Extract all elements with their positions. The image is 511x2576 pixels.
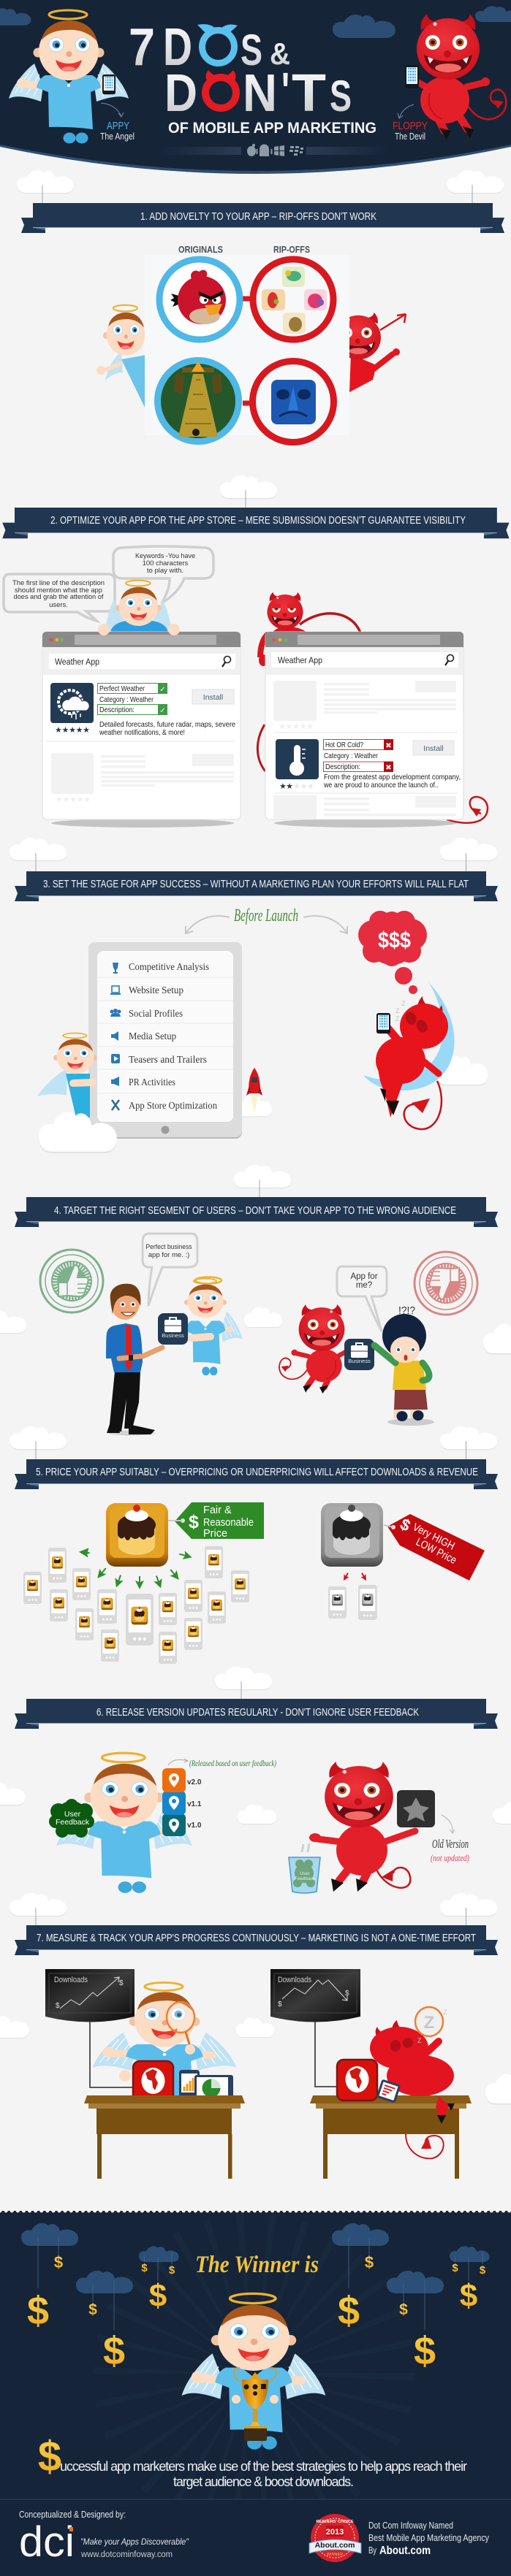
rating: two stars: ★★★★★ (279, 781, 314, 791)
angel beside tablet (37, 1033, 97, 1117)
icon: trash with user feedback: User (300, 1871, 311, 1876)
user feedback cloud: User (64, 1810, 81, 1819)
section 1: originals vs rip-offs: RIP-OFFS (273, 245, 310, 255)
speech bubble: first line: should mention what the app (15, 586, 102, 595)
note: released based on user feedback (168, 1758, 276, 1768)
placeholder listing: ★★★★★ (56, 795, 91, 804)
award text: About.com (379, 2545, 431, 2557)
banner 2 with hanging cloud (2, 475, 510, 538)
icon: old app (397, 1790, 435, 1827)
field: description: Description: (325, 763, 360, 771)
badge: readers choice 2013 (309, 2514, 361, 2562)
devil peeking (336, 312, 406, 392)
title: N (243, 64, 277, 123)
note: old version: (not updated) (431, 1852, 469, 1863)
desk setup: devil sleeping (270, 1969, 472, 2179)
title: 7 (129, 18, 155, 77)
banner 6 with hanging cloud (15, 1667, 498, 1729)
version stack: v2.0 (187, 1778, 202, 1786)
speech bubble: perfect business app: Perfect business (146, 1243, 192, 1251)
stamp: thumbs up (40, 1250, 103, 1312)
speech bubble: keywords: Keywords -You have (135, 552, 195, 560)
trophy (232, 2368, 279, 2441)
speech bubble: keywords (113, 546, 213, 603)
title: T (292, 64, 326, 123)
confused kid (374, 1304, 434, 1426)
speech bubble: keywords: to play with. (147, 567, 183, 575)
note: released based on user feedback: (Released based on user feedback) (189, 1758, 276, 1768)
before launch label with arrows: Before Launch (234, 906, 298, 925)
header (0, 0, 511, 174)
field: description: ✖ (385, 764, 392, 772)
character: Floppy the devil (408, 14, 506, 139)
rating: five stars: ★★★★★ (55, 725, 90, 735)
row: social profiles: Social Profiles (129, 1009, 183, 1020)
thought cloud (358, 911, 427, 994)
search box (271, 652, 458, 668)
before launch label with arrows (186, 906, 347, 933)
ring: rip-off temple game (253, 361, 333, 443)
install button (192, 689, 234, 704)
banner 1 with hanging clouds (17, 170, 504, 233)
sleeping devil: Z (417, 2037, 422, 2044)
price tag: fair (168, 1502, 264, 1540)
banner 3 with hanging clouds (10, 838, 498, 901)
sleeping devil: Z (395, 1007, 400, 1014)
banner 5 with hanging clouds (10, 1426, 498, 1489)
raining dollars right: $ (414, 2329, 436, 2373)
raining dollars left (21, 2223, 179, 2373)
phone: bar chart (179, 2070, 200, 2100)
devil dreaming on moon (358, 911, 488, 1129)
section clouds (0, 1782, 511, 1824)
speech bubble: app for me (337, 1266, 387, 1331)
monitor: downloads rising: $ (56, 2002, 60, 2010)
red arrows (341, 1572, 368, 1582)
angel behind browser (105, 581, 173, 632)
label: Floppy (393, 104, 428, 142)
field: title: Perfect Weather (99, 684, 145, 693)
speech bubble: perfect business app: app for me. :) (148, 1251, 189, 1259)
row: PR activities: PR Activities (129, 1077, 175, 1088)
credit: concept by dci: "Make your Apps Discoverable" (80, 2538, 189, 2547)
price tag: very high low: $ (397, 1515, 414, 1535)
badge: readers choice 2013: READERS' CHOICE (316, 2520, 354, 2524)
label: Floppy: The Devil (395, 131, 425, 142)
monitor: downloads rising (45, 1969, 135, 2022)
price tag: very high low: LOW Price (414, 1536, 458, 1567)
desk (310, 2095, 472, 2179)
raining dollars right: $ (460, 2278, 477, 2314)
raining dollars left: $ (149, 2278, 167, 2314)
cloud behind moon (436, 1055, 488, 1085)
raining dollars right: $ (399, 2301, 408, 2318)
icon: trash with user feedback: Feedback (295, 1876, 316, 1881)
price tag: fair: Reasonable (203, 1517, 254, 1529)
title (129, 18, 352, 123)
browser: bad listing (265, 632, 463, 828)
angel with business app (168, 1277, 243, 1375)
devil with old version (309, 1762, 415, 1892)
moon (363, 982, 455, 1090)
icon: rocket (246, 1068, 262, 1114)
cloud behind rocket (238, 1095, 272, 1117)
closing statement: target audience & boost downloads. (173, 2474, 354, 2489)
install button (413, 741, 454, 755)
credit: concept by dci: dci (19, 2518, 75, 2566)
version stack (162, 1768, 202, 1836)
banner 7 with hanging clouds (10, 1893, 498, 1955)
speech bubble: first line: The first line of the description (12, 579, 105, 587)
subtitle: OF MOBILE APP MARKETING (168, 120, 376, 137)
sleeping devil: Z (401, 1000, 406, 1007)
raining dollars right: $ (365, 2253, 374, 2271)
title: & (270, 37, 290, 71)
price tag: fair: Price (203, 1528, 227, 1540)
angel with magnifier (93, 1982, 236, 2112)
raining dollars right (332, 2223, 490, 2373)
raining dollars left: $ (141, 2262, 148, 2274)
app icon: weather (50, 683, 94, 723)
field: description (323, 761, 393, 772)
price tag: fair: Fair & (203, 1505, 232, 1516)
user feedback cloud (49, 1799, 94, 1838)
title: D (164, 64, 197, 123)
monitor: downloads rising: $ (119, 1979, 124, 1987)
award text (368, 2520, 490, 2557)
price tag: fair: $ (189, 1512, 199, 1532)
monitor: downloads falling: $ (345, 1990, 349, 1998)
placeholder listing top (273, 681, 456, 731)
search box (49, 654, 235, 669)
badge: readers choice 2013: WINNER (327, 2553, 343, 2557)
devil behind browser (257, 592, 488, 823)
closing statement: uccessful app marketers make use of the best strategies to help apps reach their (60, 2459, 467, 2474)
angel with version stack (56, 1753, 192, 1893)
placeholder listing top: ★★★★★ (279, 722, 314, 731)
version stack: v1.1 (187, 1800, 202, 1808)
tablet checklist (88, 942, 242, 1139)
banner 6 with hanging cloud: 6. RELEASE VERSION UPDATES REGULARLY - DON'T IGNORE USER FEEDBACK (96, 1707, 419, 1719)
row: app store optimization: App Store Optimization (129, 1101, 217, 1112)
phone in devil hand (405, 65, 419, 88)
green arrows (79, 1548, 193, 1590)
label: Appy: APPY (107, 120, 129, 132)
raining dollars left: $ (88, 2301, 97, 2318)
speech bubble: app for me: App for (350, 1272, 378, 1281)
section clouds (0, 1307, 511, 1354)
app icon: thermometer (276, 739, 319, 779)
section clouds (0, 2015, 511, 2104)
ring: rip-off birds (253, 259, 333, 340)
closing statement (38, 2433, 467, 2489)
rating: two stars: ★★ (279, 781, 293, 791)
speech bubble: first line: users. (49, 601, 68, 609)
row: website setup: Website Setup (129, 985, 183, 996)
stamp: thumbs down (415, 1252, 477, 1315)
businessman (106, 1284, 162, 1436)
user feedback cloud: Feedback (56, 1818, 90, 1827)
title: S (241, 26, 262, 74)
speech bubble: first line: does and grab the attention of (13, 593, 104, 601)
browser: good listing: Category : Weather (99, 695, 154, 704)
badge: readers choice 2013: 2013 (326, 2528, 344, 2537)
raining dollars right: $ (480, 2264, 486, 2277)
award text: By (368, 2545, 377, 2556)
install button: Install (203, 693, 223, 702)
credit: concept by dci: Conceptualized & Designed by: (19, 2510, 126, 2520)
description text: From the greatest app development company, (324, 773, 461, 781)
section 1: originals vs rip-offs (96, 245, 406, 443)
small tablet (376, 2079, 401, 2103)
browser: bad listing: Weather App (278, 657, 322, 665)
sleeping devil: Z (395, 1015, 400, 1023)
speech bubble: first line (4, 574, 115, 621)
monitor: downloads falling: $ (278, 2000, 282, 2009)
install button: Install (423, 744, 444, 753)
column labels: ORIGINALS (178, 245, 223, 255)
footer panel (0, 2211, 511, 2576)
header clouds (0, 6, 511, 38)
platform icons (159, 144, 388, 156)
field: title (98, 683, 167, 694)
app icon: globe (337, 2060, 377, 2101)
halo (195, 1277, 222, 1284)
field: title: ✖ (385, 742, 392, 750)
phones reached (23, 1546, 249, 1664)
field: description: ✓ (159, 707, 166, 715)
browser: good listing: Weather App (55, 658, 99, 667)
row: teasers and trailers: Teasers and Trailers (129, 1055, 207, 1066)
monitor: downloads rising: Downloads (54, 1976, 88, 1984)
raining dollars left: $ (103, 2329, 125, 2373)
sleeping devil: Z (443, 2009, 447, 2016)
closing statement: $ (38, 2433, 61, 2480)
browser: bad listing: Category : Weather (324, 752, 378, 760)
angel peeking (96, 305, 148, 410)
field: title (323, 739, 393, 750)
connectors (243, 299, 251, 403)
title: D (163, 18, 192, 77)
ring: original temple game (158, 361, 238, 441)
label: Appy (100, 103, 135, 142)
title: S (330, 72, 352, 121)
label: Appy: The Angel (100, 131, 135, 142)
field: description: Description: (99, 706, 135, 714)
row: media setup: Media Setup (129, 1031, 176, 1042)
comparison panel (145, 255, 349, 435)
browser: bad listing: we are proud to anounce the launch of.. (323, 781, 439, 790)
price tag: very high low: Very HIGH (411, 1521, 457, 1553)
placeholder listing bottom (273, 795, 456, 819)
sleeping devil: Z (424, 2013, 434, 2033)
desk setup: angel tracking (45, 1969, 245, 2179)
award text: Dot Com Infoway Named (368, 2520, 453, 2531)
award text: Best Mobile App Marketing Agency (368, 2533, 490, 2543)
row: competitive analysis: Competitive Analysis (129, 962, 209, 973)
note: old version (431, 1815, 469, 1863)
version stack: v1.0 (187, 1822, 202, 1830)
placeholder listing (51, 753, 234, 804)
browser: good listing (42, 624, 241, 828)
field: title: Hot OR Cold? (325, 741, 363, 749)
monitor: downloads falling (270, 1969, 360, 2022)
field: description (98, 704, 167, 715)
app icon: business (good) (158, 1313, 188, 1345)
devil with business app (279, 1304, 351, 1394)
raining dollars left: $ (169, 2264, 175, 2277)
raining dollars right: $ (452, 2262, 458, 2274)
tablet: pie chart (194, 2075, 233, 2102)
row: media setup (111, 1031, 176, 1042)
app icon: cake in colour (106, 1503, 168, 1567)
angel with trophy (182, 2293, 325, 2450)
magnifier with Z (415, 2007, 443, 2036)
phone in angel hand (102, 74, 116, 94)
angel hands (98, 624, 180, 635)
banner 4 with hanging cloud (15, 1165, 498, 1227)
description text: Detailed forecasts, future radar, maps, severe (99, 720, 235, 729)
speech bubble: perfect business app (143, 1234, 197, 1306)
field: title: ✓ (159, 686, 166, 694)
sleeping devil (376, 996, 448, 1129)
credit: concept by dci: www.dotcominfoway.com (80, 2550, 173, 2559)
heading: the winner is: The Winner is (195, 2252, 319, 2278)
confusion marks: !?!? (398, 1304, 415, 1317)
speech bubble: keywords: 100 characters (143, 559, 189, 567)
speech bubble: app for me: me? (356, 1281, 372, 1290)
row: social profiles (110, 1009, 183, 1020)
character: Appy the angel (9, 10, 129, 143)
label: Floppy: FLOPPY (393, 120, 428, 132)
banner 1 with hanging clouds: 1. ADD NOVELTY TO YOUR APP – RIP-OFFS DON'T WORK (140, 211, 376, 223)
monitor: downloads falling: Downloads (278, 1976, 311, 1984)
ring: original bird (159, 259, 240, 340)
raining dollars right: $ (338, 2289, 360, 2333)
raining dollars left: $ (27, 2289, 49, 2333)
desk (84, 2095, 245, 2179)
icon: trash with user feedback (289, 1843, 320, 1893)
row: PR activities (111, 1077, 175, 1088)
raining dollars left: $ (54, 2253, 63, 2271)
app icon: business (bad) (344, 1339, 374, 1370)
cloud in front of tablet (39, 1112, 117, 1153)
app icon: cake in grey (321, 1503, 383, 1567)
sleeping devil (370, 2007, 461, 2158)
phones in grey (328, 1585, 377, 1620)
badge: readers choice 2013: About.com (315, 2541, 355, 2550)
title: ' (281, 63, 289, 121)
thought cloud: $$$ (378, 927, 411, 952)
browser: good listing: weather notifications, & more! (99, 728, 185, 737)
price tag: very high low (384, 1514, 485, 1581)
credit: concept by dci (19, 2510, 189, 2566)
app icon: globe (133, 2061, 173, 2102)
note: old version: Old Version (432, 1837, 469, 1851)
